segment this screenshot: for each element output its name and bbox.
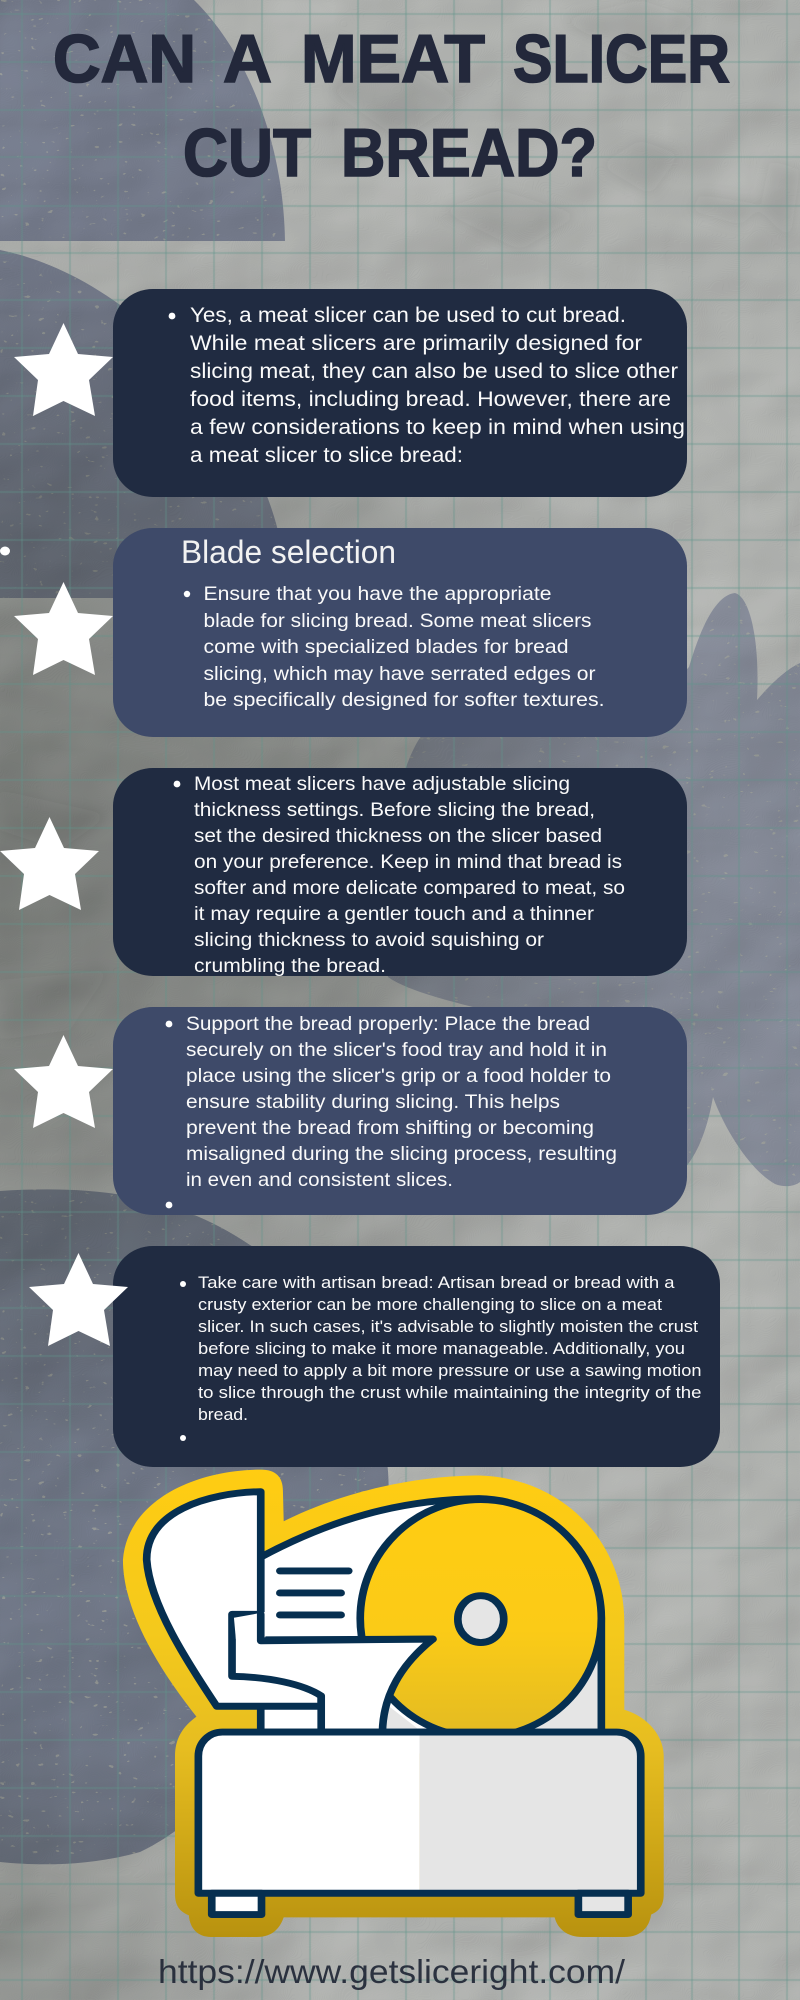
- panel: artisan bread: slicer. In such cases, it's advisable to slightly moisten the crust: [198, 1317, 698, 1336]
- panel: introduction: Yes, a meat slicer can be used to cut bread.: [190, 304, 626, 327]
- panel: artisan bread: to slice through the crust while maintaining the integrity of the: [198, 1383, 702, 1402]
- panel: slicing thickness: crumbling the bread.: [194, 955, 386, 977]
- panel: slicing thickness: on your preference. Keep in mind that bread is: [194, 851, 622, 873]
- front arm: [232, 1614, 433, 1732]
- heading: blade selection: Blade selection: [181, 534, 396, 570]
- panel: artisan bread: Take care with artisan bread: Artisan bread or bread with a: [198, 1273, 675, 1292]
- background shape: bottom-left blob: [0, 1189, 389, 1864]
- panel: support the bread: ensure stability during slicing. This helps: [186, 1091, 560, 1113]
- panel: introduction: a meat slicer to slice bread:: [190, 444, 463, 467]
- title: SLICER: [513, 21, 730, 97]
- background shape: top-left blob: [0, 0, 285, 241]
- title: MEAT: [301, 21, 485, 97]
- panel: artisan bread: may need to apply a bit more pressure or use a sawing motion: [198, 1361, 702, 1380]
- panel: slicing thickness: slicing thickness to avoid squishing or: [194, 929, 545, 951]
- panel: slicing thickness: [113, 768, 687, 977]
- panel: blade selection: be specifically designed for softer textures.: [204, 689, 604, 711]
- stray bullet: [0, 546, 10, 556]
- title: A: [223, 21, 272, 97]
- panel: slicing thickness: softer and more delicate compared to meat, so: [194, 877, 625, 899]
- background shape: right blob: [382, 593, 800, 1186]
- panel: introduction: a few considerations to keep in mind when using: [190, 416, 685, 439]
- background shape: left blob: [0, 250, 282, 598]
- panel: support the bread: Support the bread properly: Place the bread: [186, 1013, 590, 1035]
- panel: support the bread: misaligned during the slicing process, resulting: [186, 1143, 617, 1165]
- panel: support the bread: [113, 1007, 687, 1215]
- slicer body: [261, 1499, 601, 1732]
- icon: star 5: [29, 1253, 128, 1346]
- icon: meat slicer illustration: [123, 1470, 664, 1937]
- shaded body section: [385, 1656, 598, 1729]
- panel: support the bread: in even and consistent slices.: [186, 1169, 453, 1191]
- sticker outline: [123, 1470, 664, 1937]
- panel: blade selection: [113, 528, 687, 737]
- slicer feet: [212, 1893, 261, 1915]
- panel: artisan bread: bread.: [198, 1405, 248, 1424]
- panel: artisan bread: before slicing to make it more manageable. Additionally, you: [198, 1339, 685, 1358]
- panel: introduction: [113, 289, 687, 497]
- icon: star 1: [14, 323, 113, 416]
- panel: slicing thickness: it may require a gentler touch and a thinner: [194, 903, 595, 925]
- title: [53, 21, 730, 191]
- panel: support the bread: prevent the bread from shifting or becoming: [186, 1117, 594, 1139]
- panel: blade selection: come with specialized blades for bread: [204, 636, 568, 658]
- icon: star 4: [14, 1035, 113, 1128]
- panel: artisan bread: crusty exterior can be more challenging to slice on a meat: [198, 1295, 662, 1314]
- panel: blade selection: blade for slicing bread. Some meat slicers: [204, 610, 592, 632]
- disc hub: [458, 1596, 504, 1643]
- panel: slicing thickness: Most meat slicers have adjustable slicing: [194, 773, 570, 795]
- panel: support the bread: securely on the slicer's food tray and hold it in: [186, 1039, 607, 1061]
- title: CUT: [183, 115, 311, 191]
- panel: slicing thickness: thickness settings. Before slicing the bread,: [194, 799, 595, 821]
- hopper panel: [147, 1492, 321, 1706]
- panel: blade selection: slicing, which may have serrated edges or: [204, 663, 596, 685]
- footer url: https://www.getsliceright.com/: [158, 1953, 626, 1990]
- panel: slicing thickness: set the desired thickness on the slicer based: [194, 825, 602, 847]
- icon: star 3: [0, 817, 99, 910]
- panel: introduction: While meat slicers are primarily designed for: [190, 332, 642, 355]
- icon: star 2: [14, 582, 113, 675]
- panel: artisan bread: [113, 1246, 720, 1467]
- slicer disc: [360, 1500, 601, 1737]
- slicer base: [198, 1732, 420, 1893]
- title: BREAD?: [341, 115, 597, 191]
- panel: introduction: slicing meat, they can also be used to slice other: [190, 360, 678, 383]
- paper lines: [280, 1571, 349, 1615]
- panel: introduction: food items, including bread. However, there are: [190, 388, 671, 411]
- panel: blade selection: Ensure that you have the appropriate: [204, 583, 552, 605]
- panel: support the bread: place using the slicer's grip or a food holder to: [186, 1065, 611, 1087]
- title: CAN: [53, 21, 196, 97]
